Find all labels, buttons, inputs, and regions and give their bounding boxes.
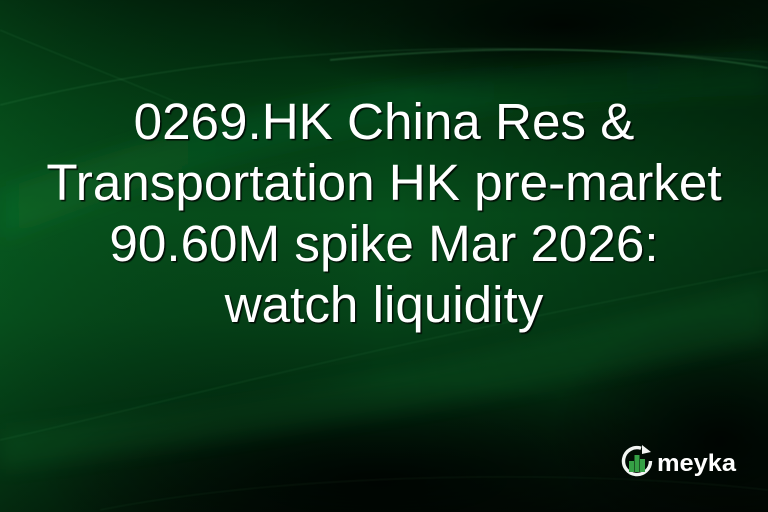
- title: 90.60M spike Mar 2026:: [109, 215, 659, 272]
- logo: meyka: [622, 445, 737, 477]
- title: 0269.HK China Res &: [134, 93, 634, 150]
- title: [46, 93, 723, 334]
- icon: ring with bars: [624, 445, 651, 475]
- wordmark: meyka: [657, 450, 737, 477]
- title: watch liquidity: [225, 276, 543, 333]
- title: Transportation HK pre-market: [46, 154, 722, 211]
